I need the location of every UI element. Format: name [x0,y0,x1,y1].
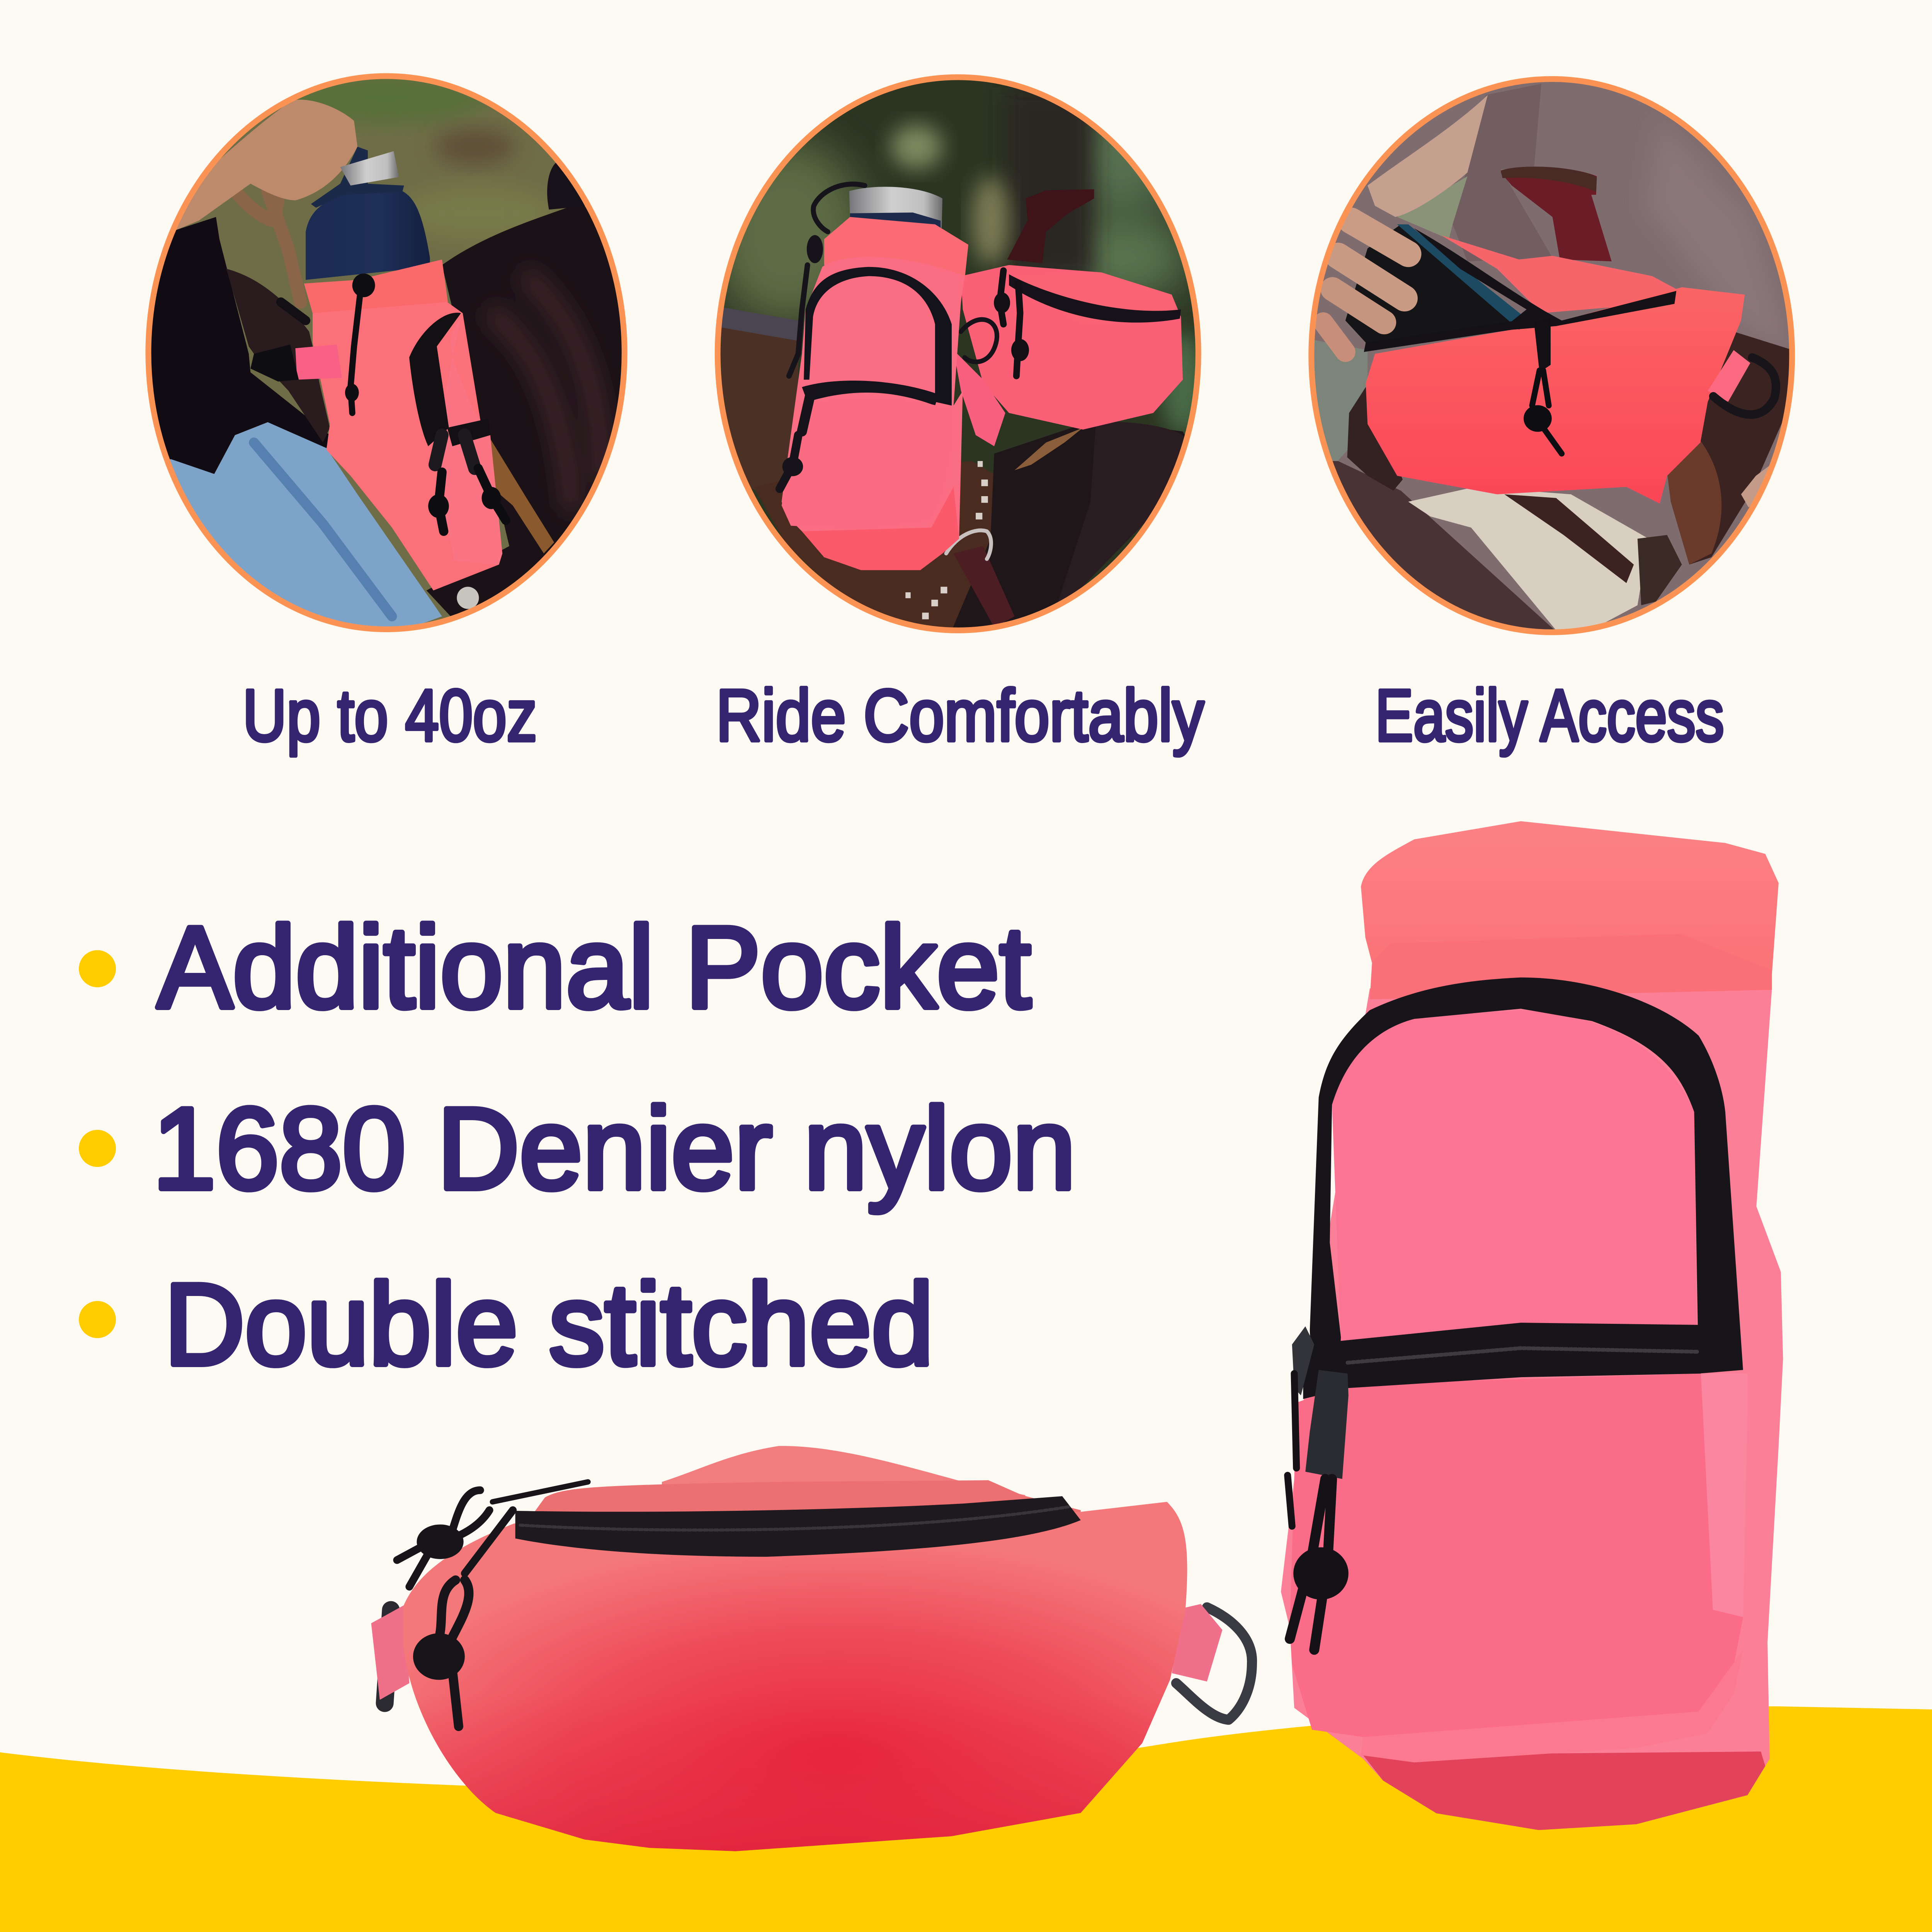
caption: Ride Comfortably: Ride Comfortably [716,675,1204,757]
bullet list [79,902,1076,1389]
text: 1680 Denier nylon: 1680 Denier nylon [153,1083,1076,1214]
orange ring [718,77,1198,630]
horizontal zipper [1303,1323,1701,1399]
side strip [1701,1374,1747,1664]
text: Double stitched: Double stitched [164,1259,934,1389]
product: bottle pouch [1281,821,1783,1830]
product: hip pack [371,1446,1252,1851]
curved zipper [1310,978,1743,1388]
upper pocket [1332,1010,1696,1341]
bottom panel [1363,1752,1765,1830]
main zipper [515,1496,1081,1557]
orange ring [148,76,624,629]
photo circle: pouches on saddle [709,73,1205,635]
pack body [403,1502,1187,1851]
yellow ground wave [0,1706,1932,1932]
lower pocket [1290,1374,1743,1744]
zipper pull and cord [1287,1327,1349,1650]
text: Additional Pocket: Additional Pocket [157,902,1031,1032]
D-ring [1176,1607,1252,1720]
zipper pull cords [397,1482,588,1726]
pouch back [1281,988,1783,1830]
photo circle: rider lifting bottle from pouch [137,69,640,635]
bullet 3 [79,1301,116,1338]
caption: Up to 40oz: Up to 40oz [243,675,537,757]
photo circle: phone into hip pack [1308,77,1796,635]
bullet 1 [79,950,116,987]
bullet 2 [79,1130,116,1167]
orange ring [1311,79,1792,632]
collar [1361,821,1779,974]
caption: Easily Access: Easily Access [1375,675,1724,757]
webbing straps [371,1605,409,1700]
